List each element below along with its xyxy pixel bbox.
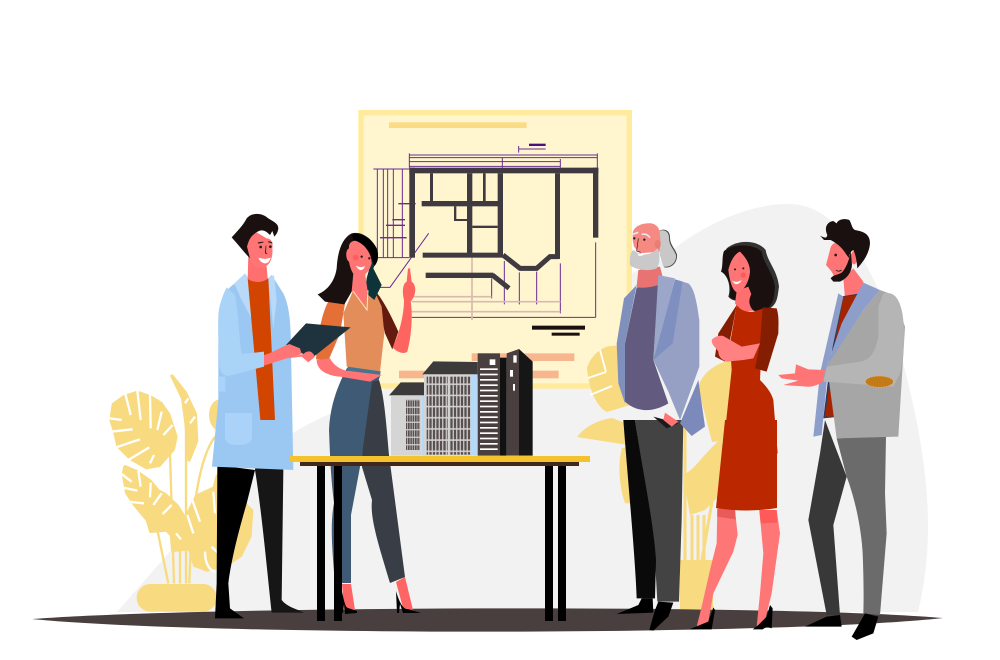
plant: left [109, 376, 252, 610]
coat [212, 273, 293, 470]
eyes and nose [258, 241, 272, 254]
dress skirt [716, 420, 777, 510]
stems [685, 425, 714, 560]
dimension marker [529, 144, 546, 146]
leaf upper right [698, 360, 732, 442]
leaf upper left [587, 346, 630, 412]
smile [732, 280, 742, 284]
person: bearded man [778, 219, 905, 640]
dimension lines [373, 146, 597, 320]
plant: right [577, 346, 732, 609]
middle building [422, 361, 478, 456]
hair strand over neck [749, 288, 770, 311]
poster: blueprint [361, 113, 629, 386]
head [630, 223, 661, 270]
neck [735, 287, 753, 312]
neck [637, 267, 663, 289]
person: old man [617, 223, 705, 631]
bars at bottom of poster [399, 353, 574, 378]
table legs [317, 466, 566, 621]
beard [630, 248, 659, 270]
jacket [827, 290, 905, 438]
ground shadow [32, 608, 943, 632]
coat cuff [218, 377, 225, 392]
upper body [617, 275, 705, 436]
hair [232, 214, 278, 258]
leaf behind coat [211, 401, 229, 429]
plant stems [157, 403, 215, 583]
dark leg [362, 380, 405, 583]
upper body [778, 283, 905, 438]
neck [248, 255, 268, 282]
coat pocket [225, 413, 252, 445]
lapel shade [653, 279, 683, 360]
inner jacket [823, 293, 860, 418]
coat lapels [234, 273, 277, 328]
poster sheet [361, 113, 629, 386]
ear [851, 251, 857, 264]
person: woman in red dress [689, 242, 780, 629]
far sleeve [375, 291, 398, 349]
big leaf [171, 476, 252, 570]
upper body [712, 305, 779, 453]
coat and head [212, 273, 293, 470]
head [232, 214, 278, 282]
near sleeve [316, 298, 345, 361]
trousers and shoes [805, 420, 887, 640]
coat sleeve [218, 287, 264, 376]
raised arm [393, 268, 415, 353]
neck [843, 268, 863, 300]
face [346, 241, 372, 278]
top [343, 288, 384, 372]
pot [680, 560, 713, 609]
monstera leaf middle [123, 467, 192, 542]
hair [637, 230, 677, 289]
small building [389, 382, 425, 456]
eye and nose [633, 237, 645, 241]
shirt [625, 285, 668, 410]
face [826, 242, 852, 282]
right sleeve [755, 307, 779, 372]
tall leaf [172, 376, 197, 460]
smile [356, 266, 365, 270]
eye [834, 254, 837, 256]
beard [831, 250, 852, 282]
dark tower [500, 349, 533, 456]
clipboard and hand [264, 323, 351, 366]
background blob [117, 204, 928, 612]
person: woman in tan top [316, 233, 421, 614]
hair light [657, 230, 676, 267]
leaf slits upper [588, 350, 612, 395]
skull [633, 223, 661, 253]
sleeve [823, 293, 904, 387]
table edge [300, 462, 579, 466]
back hair [318, 233, 378, 304]
poster title bar [389, 122, 527, 128]
pointed leaf [577, 418, 630, 445]
leaf lower right [683, 438, 725, 515]
eyes [734, 267, 744, 270]
cheek [741, 272, 746, 278]
hand [264, 344, 315, 366]
hand in pocket [653, 417, 678, 428]
shoes [341, 591, 421, 614]
ear [655, 240, 661, 249]
neck [352, 273, 368, 305]
leaf behind trousers [619, 445, 640, 505]
trousers and shoes [215, 420, 304, 618]
legs and heels [689, 508, 780, 629]
trousers and shoes [617, 420, 683, 631]
striped tower [478, 353, 500, 456]
smile [258, 258, 271, 263]
pot [138, 586, 215, 610]
hair shadow [722, 242, 779, 311]
crossed arms [712, 336, 760, 362]
fringe [352, 234, 378, 266]
head [721, 242, 779, 312]
jacket right [653, 279, 699, 420]
hand [778, 364, 825, 387]
hair [721, 245, 775, 311]
necklace [353, 290, 368, 310]
face [728, 252, 750, 292]
lapel [653, 275, 675, 360]
left panel [813, 293, 843, 437]
shirt [248, 278, 275, 420]
smile [836, 270, 842, 271]
eyebrow [633, 232, 650, 238]
jacket left [617, 285, 637, 403]
forearm [317, 358, 382, 382]
cheek [353, 255, 359, 261]
eyes [360, 255, 370, 259]
scale bars [532, 326, 585, 336]
right lapel [827, 283, 880, 367]
leaf slits [109, 391, 218, 572]
mouth [637, 252, 646, 256]
jacket back panel [680, 380, 705, 436]
person: man in lab coat [212, 214, 304, 618]
hair [820, 219, 870, 268]
belt [347, 367, 381, 376]
table [290, 456, 590, 621]
lower hair [365, 260, 382, 300]
left sleeve [715, 305, 737, 362]
head [318, 233, 382, 310]
elbow patch [865, 376, 893, 387]
head [820, 219, 870, 300]
clipboard [286, 323, 351, 358]
jeans [329, 368, 380, 583]
dress [723, 305, 778, 453]
floor plan walls [409, 168, 598, 288]
face [246, 232, 273, 268]
upper body [316, 268, 415, 382]
building models [389, 349, 533, 456]
monstera leaf top [111, 392, 176, 468]
foot skin [342, 577, 413, 610]
hair shadow [658, 230, 677, 267]
shirt [825, 295, 859, 417]
table top [290, 456, 590, 462]
